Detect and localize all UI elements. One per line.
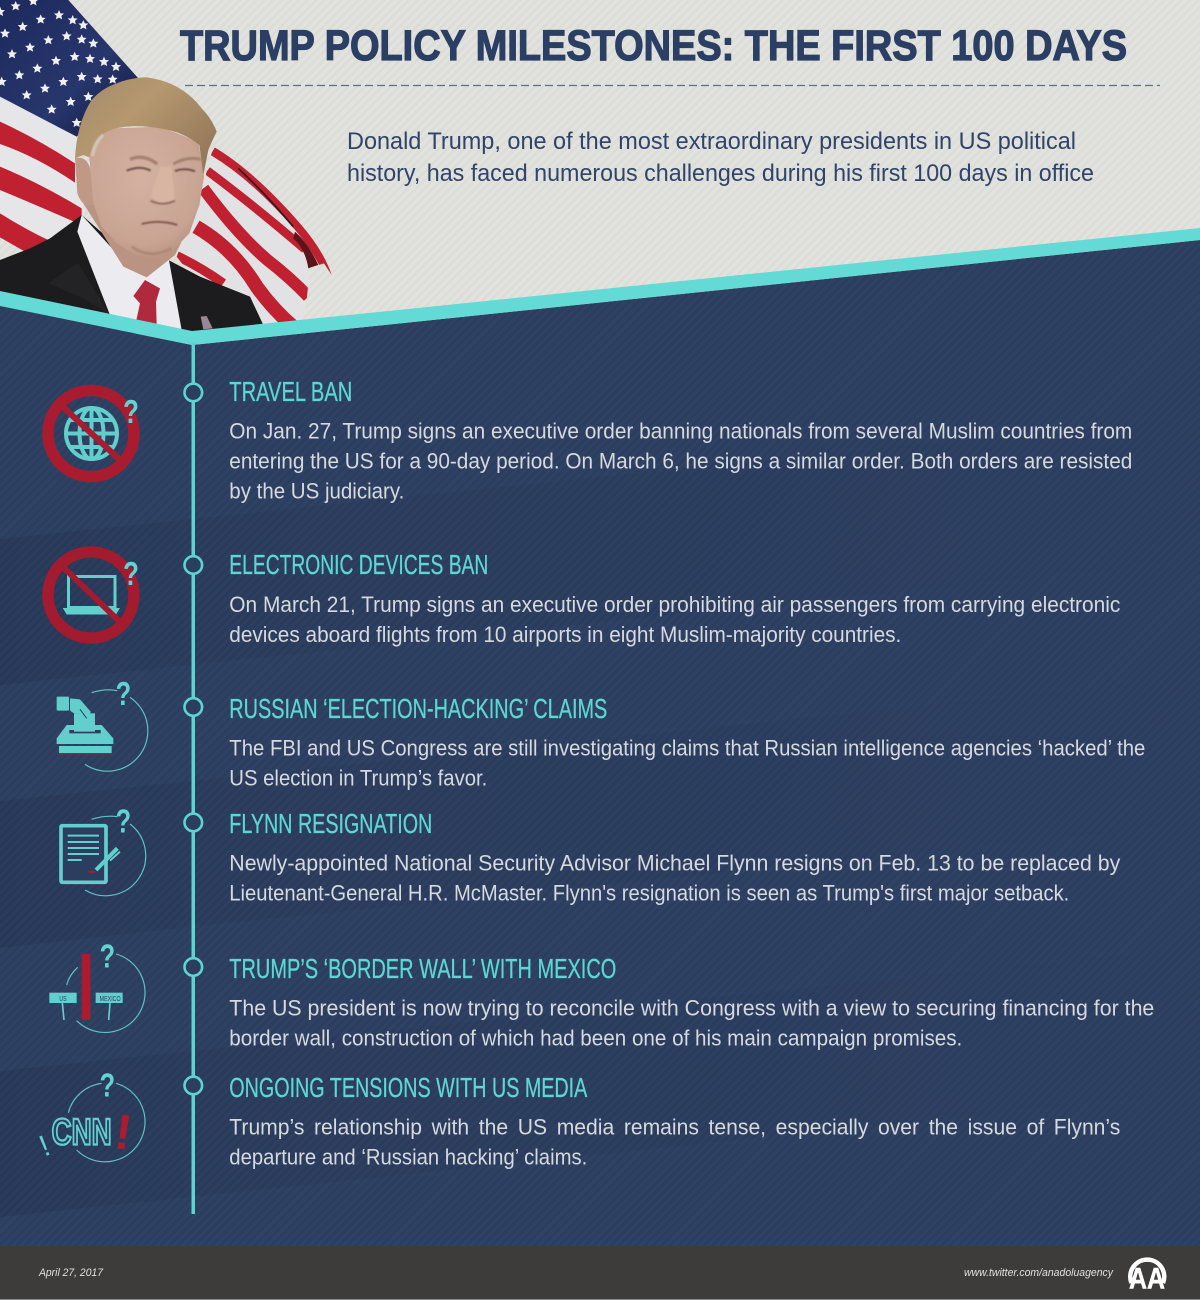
- suit and shirt: [0, 215, 263, 333]
- hair: [75, 77, 217, 175]
- timeline: [184, 343, 202, 1214]
- section: electronic devices ban: ELECTRONIC DEVICES BAN: [229, 549, 488, 580]
- section: russian election hacking: US election in Trump’s favor.: [229, 766, 487, 791]
- intro text: Donald Trump, one of the most extraordinary presidents in US political: [347, 128, 1076, 155]
- date: April 27, 2017: [38, 1267, 104, 1279]
- flag: [0, 0, 332, 330]
- canton: [0, 0, 138, 137]
- icon: ballot box: [57, 676, 148, 771]
- background bands: [0, 415, 1200, 1217]
- icon: border wall: MEXICO: [100, 994, 121, 1003]
- header background: [0, 0, 1200, 345]
- right side of flag: [177, 147, 332, 330]
- section: electronic devices ban: devices aboard flights from 10 airports in eight Muslim-majority countries.: [229, 622, 901, 647]
- icon: travel ban globe: [48, 390, 139, 476]
- section: flynn resignation: [229, 808, 1121, 906]
- section: travel ban: by the US judiciary.: [229, 479, 404, 504]
- intro text: [347, 128, 1094, 187]
- section: media tensions: departure and ‘Russian hacking’ claims.: [229, 1145, 587, 1170]
- face: [89, 127, 204, 258]
- icon: CNN media: !: [35, 1130, 55, 1163]
- section: flynn resignation: Lieutenant-General H.R. McMaster. Flynn's resignation is seen as Trump's first major setback.: [229, 881, 1069, 906]
- icon: border wall: [49, 938, 145, 1032]
- icon: CNN media: [35, 1067, 145, 1163]
- intro text: history, has faced numerous challenges during his first 100 days in office: [347, 160, 1094, 187]
- head: [75, 77, 217, 277]
- icon: CNN media: ?: [100, 1067, 115, 1105]
- section: russian election hacking: [229, 693, 1145, 791]
- icon: border wall: ?: [100, 938, 115, 975]
- left side of flag: [0, 97, 87, 267]
- teal chevron band: [0, 228, 1200, 345]
- portrait with American flag: [0, 0, 332, 333]
- icon: electronic devices ban laptop: [48, 552, 139, 638]
- section: electronic devices ban: On March 21, Trump signs an executive order prohibiting air passengers from carrying electronic: [229, 592, 1120, 617]
- icon: resignation letter: [61, 803, 146, 896]
- section: flynn resignation: FLYNN RESIGNATION: [229, 808, 432, 839]
- section: travel ban: On Jan. 27, Trump signs an executive order banning nationals from several Muslim countries from: [229, 419, 1132, 444]
- section: media tensions: ONGOING TENSIONS WITH US MEDIA: [229, 1072, 588, 1103]
- section: border wall: TRUMP’S ‘BORDER WALL’ WITH MEXICO: [229, 953, 616, 984]
- icon: travel ban globe: ?: [123, 394, 139, 431]
- icon: border wall: US: [59, 994, 67, 1003]
- icon: ballot box: ?: [116, 676, 131, 713]
- stars: [0, 0, 121, 127]
- section: media tensions: [229, 1072, 1120, 1170]
- section: flynn resignation: Newly-appointed National Security Advisor Michael Flynn resigns on Feb. 13 to be replaced by: [229, 851, 1121, 876]
- section: border wall: The US president is now trying to reconcile with Congress with a view to securing financing for the: [229, 996, 1154, 1021]
- section: travel ban: TRAVEL BAN: [229, 376, 352, 407]
- neck: [83, 203, 200, 277]
- section: travel ban: entering the US for a 90-day period. On March 6, he signs a similar order. Both orders are resisted: [229, 449, 1132, 474]
- section: electronic devices ban: [229, 549, 1120, 647]
- icon: electronic devices ban laptop: ?: [123, 556, 139, 593]
- section: media tensions: Trump’s relationship with the US media remains tense, especially over the issue of Flynn’s: [229, 1115, 1120, 1140]
- logo: Anadolu Agency: AA: [1129, 1262, 1165, 1296]
- section: russian election hacking: RUSSIAN ‘ELECTION-HACKING’ CLAIMS: [229, 693, 607, 724]
- twitter link text: www.twitter.com/anadoluagency: [964, 1267, 1114, 1279]
- icon: resignation letter: ?: [116, 803, 131, 841]
- section: travel ban: [229, 376, 1132, 504]
- dark body panel: [0, 240, 1200, 1246]
- footer bar: [0, 1246, 1200, 1300]
- facial features: [127, 157, 201, 254]
- section: border wall: border wall, construction of which had been one of his main campaign promises.: [229, 1026, 962, 1051]
- ear: [75, 158, 95, 205]
- icon: CNN media: CNN: [52, 1111, 112, 1153]
- section: border wall: [229, 953, 1154, 1051]
- icon: CNN media: !: [111, 1103, 136, 1161]
